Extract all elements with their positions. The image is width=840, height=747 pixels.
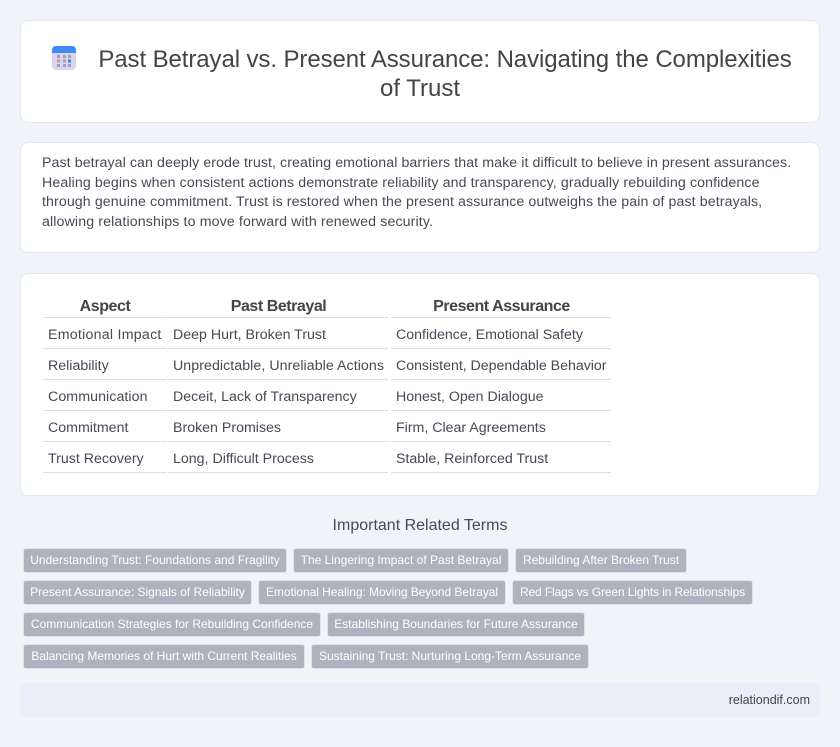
row: reliability: Reliability [48, 358, 109, 374]
row: commitment: Broken Promises [173, 420, 281, 436]
footer [20, 683, 820, 717]
row: reliability: Consistent, Dependable Behavior [396, 358, 606, 374]
tag list: related terms: Balancing Memories of Hurt with Current Realities [31, 649, 297, 663]
footer site name: relationdif.com [729, 693, 810, 707]
tag list: related terms: Present Assurance: Signals of Reliability [30, 585, 245, 599]
tag list: related terms [23, 548, 753, 669]
row: communication: Communication [48, 389, 148, 405]
row: emotional impact: Emotional Impact [48, 327, 162, 343]
tag list: related terms: The Lingering Impact of Past Betrayal [301, 553, 501, 567]
table header: Past Betrayal [231, 298, 326, 315]
tag list: related terms: Communication Strategies for Rebuilding Confidence [31, 617, 313, 631]
title [98, 46, 792, 102]
panel: intro paragraph: Healing begins when consistent actions demonstrate reliability and transparency, gradually rebuilding confidence [42, 175, 760, 191]
tag list: related terms: Sustaining Trust: Nurturing Long-Term Assurance [319, 649, 581, 663]
table header: Aspect [80, 298, 130, 315]
panel: intro paragraph: Past betrayal can deeply erode trust, creating emotional barriers that make it difficult to believe in present assurances. [42, 155, 791, 171]
row: trust recovery: Long, Difficult Process [173, 451, 314, 467]
tag list: related terms: Establishing Boundaries for Future Assurance [334, 617, 578, 631]
panel: comparison table [20, 273, 820, 496]
row: emotional impact: Confidence, Emotional Safety [396, 327, 583, 343]
tag list: related terms: Understanding Trust: Foundations and Fragility [30, 553, 280, 567]
panel: header [20, 20, 820, 123]
title: Past Betrayal vs. Present Assurance: Navigating the Complexities [98, 46, 792, 73]
table header: Present Assurance [433, 298, 570, 315]
row: trust recovery [48, 451, 548, 467]
title: of Trust [380, 75, 460, 102]
row: commitment [48, 420, 546, 436]
row: communication [48, 389, 544, 405]
row: commitment: Commitment [48, 420, 128, 436]
tag list: related terms: Rebuilding After Broken Trust [523, 553, 679, 567]
row: communication: Honest, Open Dialogue [396, 389, 544, 405]
row: communication: Deceit, Lack of Transparency [173, 389, 357, 405]
panel: intro paragraph: through genuine commitment. Trust is restored when the present assurance outweighs the pain of past betrayals, [42, 194, 762, 210]
row: reliability [48, 358, 606, 374]
row: emotional impact: Deep Hurt, Broken Trust [173, 327, 326, 343]
tag list: related terms: Emotional Healing: Moving Beyond Betrayal [266, 585, 498, 599]
row: emotional impact [48, 327, 583, 343]
row: commitment: Firm, Clear Agreements [396, 420, 546, 436]
row: reliability: Unpredictable, Unreliable Actions [173, 358, 384, 374]
row: trust recovery: Trust Recovery [48, 451, 144, 467]
row: trust recovery: Stable, Reinforced Trust [396, 451, 548, 467]
heading: related terms: Important Related Terms [333, 517, 507, 534]
panel: intro paragraph [20, 142, 820, 253]
icon: calendar [52, 46, 76, 70]
tag list: related terms: Red Flags vs Green Lights in Relationships [520, 585, 745, 599]
table header [80, 298, 570, 315]
panel: intro paragraph: allowing relationships to move forward with renewed security. [42, 214, 433, 230]
